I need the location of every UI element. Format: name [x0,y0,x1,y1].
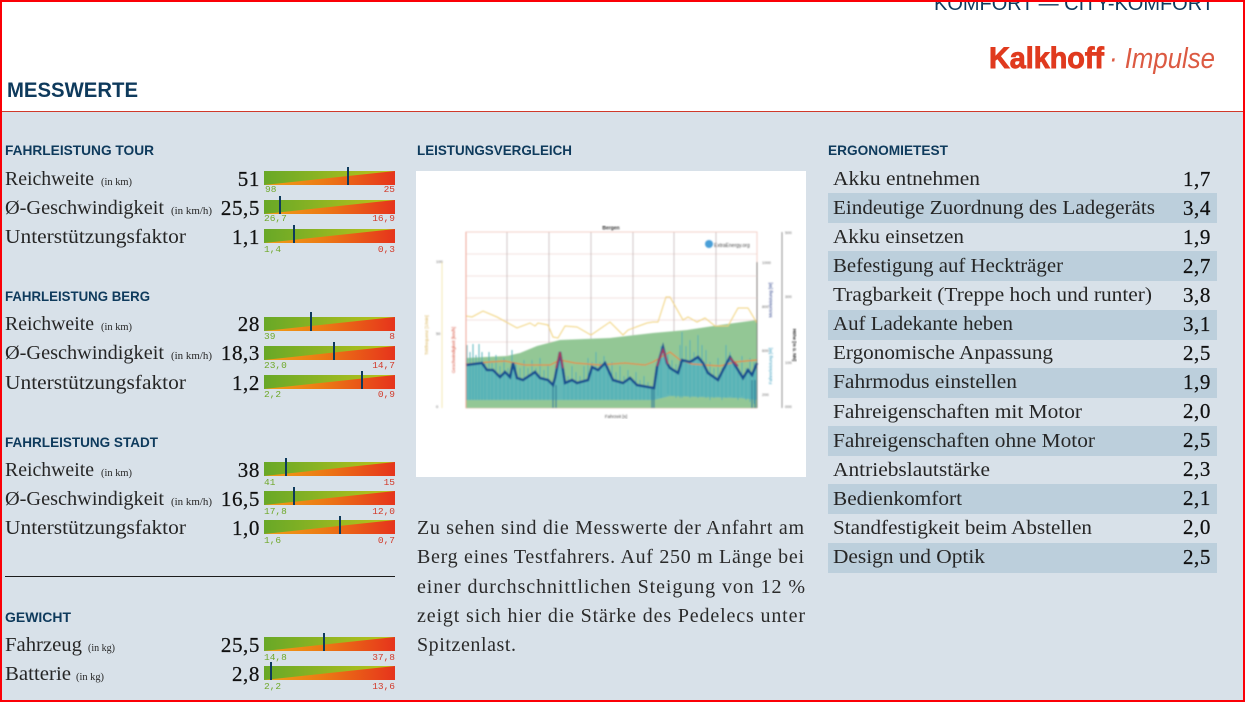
table rows: 1,9 [1183,370,1211,394]
chart: measurement plot: 100 [785,360,792,365]
row: Reichweite: 39 [264,331,276,342]
row: Reichweite: 8 [389,331,395,342]
table rows: Tragbarkeit (Treppe hoch und runter) [833,284,1152,306]
row: Reichweite: 41 [264,477,276,488]
text block: caption: zeigt sich hier die Stärke des Pedelecs unter [417,605,805,627]
table rows: Akku entnehmen [833,168,980,190]
chart: measurement plot: 000 [785,404,792,409]
text block: caption [417,517,805,656]
chart: measurement plot: 500 [785,230,792,235]
chart: measurement plot: Fahrerleistung [W] [768,348,773,384]
row: Batterie: 2,8 [232,662,260,686]
chart: measurement plot: 200 [762,392,769,397]
chart: measurement plot: Fahrzeit [s] [605,414,627,419]
row: Reichweite: (in km) [101,468,132,479]
row: Geschwindigkeit: 25,5 [221,196,260,220]
chart: measurement plot: Trittfrequenz [1/min] [424,315,429,355]
panel: Ergonomietest [828,142,1217,573]
row: Unterstützungsfaktor: 0,7 [378,535,395,546]
table rows: Design und Optik [833,546,985,568]
table rows [833,167,1211,569]
row: Geschwindigkeit: Ø-Geschwindigkeit [5,488,164,510]
row: Fahrzeug [5,633,395,663]
row: Fahrzeug: Fahrzeug [5,634,82,656]
row: Fahrzeug: 25,5 [221,633,260,657]
row: Unterstützungsfaktor: Unterstützungsfaktor [5,372,186,394]
row: Fahrzeug: 14,8 [264,652,287,663]
table rows: 2,5 [1183,341,1211,365]
row: Reichweite: 25 [384,184,395,195]
row: Unterstützungsfaktor: 0,9 [378,389,395,400]
table rows: 3,4 [1183,196,1211,220]
table rows: 3,1 [1183,312,1211,336]
row: Reichweite: Reichweite [5,168,94,190]
header: product name: · Impulse [1109,43,1215,75]
header: product name [989,42,1215,75]
table rows: Bedienkomfort [833,488,962,510]
table rows: Eindeutige Zuordnung des Ladegeräts [833,197,1155,219]
row: Geschwindigkeit: 26,7 [264,213,287,224]
chart: measurement plot [416,171,806,477]
row: Unterstützungsfaktor: 1,2 [232,371,260,395]
row: Geschwindigkeit: (in km/h) [171,351,212,362]
row: Geschwindigkeit: 14,7 [372,360,395,371]
text block: caption: einer durchschnittlichen Steigung von 12 % [417,576,805,598]
text block: caption: Spitzenlast. [417,634,516,656]
heading: Gewicht: GEWICHT [5,609,71,625]
table rows: Auf Ladekante heben [833,313,1013,335]
row: Unterstützungsfaktor: 1,1 [232,225,260,249]
row: Unterstützungsfaktor: Unterstützungsfaktor [5,517,186,539]
chart: measurement plot: Geschwindigkeit [km/h] [451,327,456,373]
chart: measurement plot: 0 [436,404,439,409]
panel: Leistungsvergleich [416,142,806,656]
chart: measurement plot: 300 [785,294,792,299]
heading: Leistungsvergleich: LEISTUNGSVERGLEICH [417,142,572,158]
row: Unterstützungsfaktor: Unterstützungsfaktor [5,226,186,248]
row: Unterstützungsfaktor: 0,3 [378,244,395,255]
row: Batterie: Batterie [5,663,71,685]
row: Geschwindigkeit: 16,5 [221,487,260,511]
row: Fahrzeug: 37,8 [372,652,395,663]
table rows: 2,0 [1183,515,1211,539]
row: Geschwindigkeit [5,196,395,224]
heading: Fahrleistung Stadt: FAHRLEISTUNG STADT [5,434,158,450]
table rows: 1,7 [1183,167,1211,191]
row: Unterstützungsfaktor: 1,0 [232,516,260,540]
table rows: 1,9 [1183,225,1211,249]
row: Geschwindigkeit: 18,3 [221,341,260,365]
row: Reichweite: 15 [384,477,395,488]
panel: Fahrleistung Stadt [5,434,395,546]
row: Reichweite: 28 [238,312,260,336]
row: Reichweite: 51 [238,167,260,191]
chart: measurement plot: 50 [436,331,441,336]
table rows: 2,5 [1183,428,1211,452]
table rows: 2,1 [1183,486,1211,510]
table rows: Standfestigkeit beim Abstellen [833,517,1092,539]
text block: caption: Zu sehen sind die Messwerte der Anfahrt am [417,517,804,539]
table rows: Antriebslautstärke [833,459,990,481]
heading: Ergonomietest: ERGONOMIETEST [828,142,948,158]
row: Reichweite [5,167,395,195]
row: Reichweite: Reichweite [5,313,94,335]
row: Reichweite: 98 [265,184,277,195]
row: Unterstützungsfaktor [5,225,395,255]
chart: measurement plot: 1000 [762,260,772,265]
row: Geschwindigkeit: Ø-Geschwindigkeit [5,197,164,219]
row: Unterstützungsfaktor [5,516,395,546]
row: Reichweite [5,458,395,488]
table rows: Fahreigenschaften mit Motor [833,401,1082,423]
table stripes [828,193,1217,573]
chart: measurement plot: ExtraEnergy.org [714,243,750,249]
row: Reichweite: (in km) [101,322,132,333]
table rows: Akku einsetzen [833,226,964,248]
row: Geschwindigkeit: 12,0 [372,506,395,517]
header band [0,0,1245,112]
table rows: 3,8 [1183,283,1211,307]
row: Fahrzeug: (in kg) [88,643,115,654]
chart: measurement plot: Bergen [602,226,620,232]
table rows: 2,7 [1183,254,1211,278]
table rows: Befestigung auf Heckträger [833,255,1063,277]
row: Geschwindigkeit: 23,0 [264,360,287,371]
table rows: Fahrmodus einstellen [833,371,1017,393]
row: Geschwindigkeit: (in km/h) [171,497,212,508]
text block: caption: Berg eines Testfahrers. Auf 250 m Länge bei [417,546,804,568]
row: Geschwindigkeit [5,487,395,517]
row: Batterie [5,662,395,692]
heading: Fahrleistung Tour: FAHRLEISTUNG TOUR [5,142,154,158]
row: Reichweite [5,312,395,342]
row: Geschwindigkeit [5,341,395,371]
row: Batterie: 13,6 [372,681,395,692]
chart: measurement plot: 800 [762,304,769,309]
row: Reichweite: (in km) [101,177,132,188]
chart: measurement plot: 100 [436,259,443,264]
row: Unterstützungsfaktor: 2,2 [264,389,281,400]
main heading: MESSWERTE [7,79,138,102]
table rows: Ergonomische Anpassung [833,342,1053,364]
row: Batterie: (in kg) [76,672,104,683]
panel: Gewicht [5,609,395,692]
row: Geschwindigkeit: Ø-Geschwindigkeit [5,342,164,364]
chart: measurement plot: Höhe [m ü. NN] [792,329,797,362]
row: Geschwindigkeit: (in km/h) [171,206,212,217]
table rows: Fahreigenschaften ohne Motor [833,430,1095,452]
row: Reichweite: 38 [238,458,260,482]
row: Unterstützungsfaktor: 1,4 [264,244,281,255]
row: Geschwindigkeit: 16,9 [372,213,395,224]
header: product name: Kalkhoff [989,42,1105,75]
row: Unterstützungsfaktor [5,371,395,400]
row: Unterstützungsfaktor: 1,6 [264,535,281,546]
chart: measurement plot: Motorleistung [W] [768,282,773,318]
table rows: 2,3 [1183,457,1211,481]
chart: measurement plot: 600 [762,348,769,353]
row: Geschwindigkeit: 17,8 [264,506,287,517]
row: Reichweite: Reichweite [5,459,94,481]
heading: Fahrleistung Berg: FAHRLEISTUNG BERG [5,288,150,304]
row: Batterie: 2,2 [264,681,281,692]
panel: Fahrleistung Tour [5,142,395,255]
panel: Fahrleistung Berg [5,288,395,400]
table rows: 2,0 [1183,399,1211,423]
table rows: 2,5 [1183,545,1211,569]
